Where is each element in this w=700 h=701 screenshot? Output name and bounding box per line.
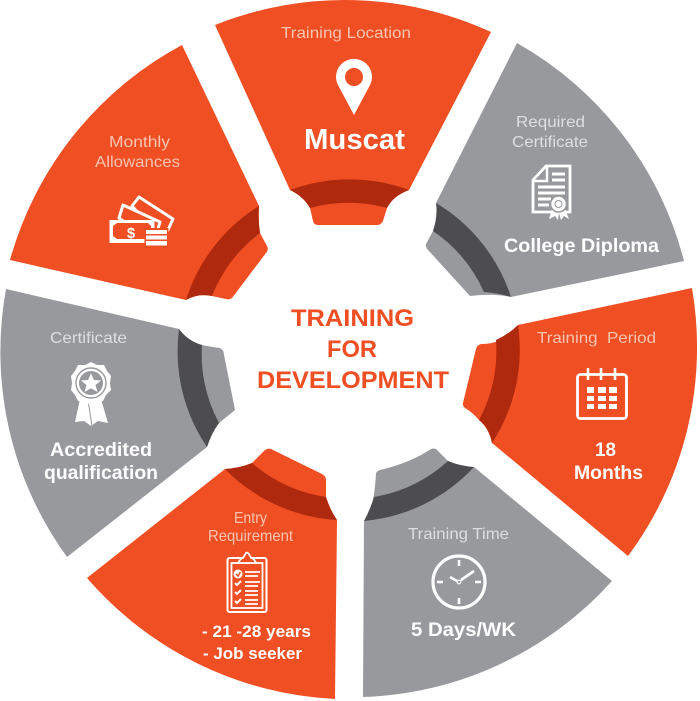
panel: required certificate <box>426 43 684 297</box>
band <box>178 329 219 447</box>
label: Training Time <box>408 526 509 543</box>
value: qualification <box>44 463 158 484</box>
value: - Job seeker <box>203 644 302 663</box>
icon: banknotes and coins: $ <box>127 225 136 242</box>
label: Certificate <box>50 330 127 347</box>
value: Months <box>574 463 643 484</box>
segment shape <box>0 289 235 557</box>
label: Requirement <box>208 528 294 545</box>
value: 5 Days/WK <box>411 620 516 641</box>
icon: map pin <box>336 59 372 115</box>
band <box>479 325 520 443</box>
value: Muscat <box>304 124 405 156</box>
icon: diploma <box>533 166 570 220</box>
segment shape <box>463 288 697 556</box>
icon: banknotes and coins <box>110 197 173 246</box>
band <box>186 206 260 300</box>
title: TRAINING <box>291 305 414 332</box>
label: Training Location <box>281 25 411 42</box>
segment shape <box>215 0 491 225</box>
panel: training time <box>363 448 612 697</box>
panel: certificate <box>0 289 235 557</box>
panel: entry requirement <box>87 449 337 699</box>
panel: monthly allowances <box>10 45 268 300</box>
value: - 21 -28 years <box>202 622 311 641</box>
value: Accredited <box>50 440 152 461</box>
segment shape <box>426 43 684 297</box>
segment shape <box>363 448 612 697</box>
value: College Diploma <box>504 236 659 257</box>
title: FOR <box>327 336 377 363</box>
icon: clock <box>433 556 485 608</box>
segment shape <box>87 449 337 699</box>
band <box>364 461 474 521</box>
label: Entry <box>234 510 267 527</box>
label: Required <box>516 114 585 131</box>
icon: rosette award <box>71 362 111 426</box>
icon: clipboard checklist <box>228 553 266 612</box>
band <box>225 463 337 520</box>
label: Certificate <box>512 134 588 151</box>
label: Monthly <box>109 134 170 151</box>
band <box>290 179 409 208</box>
icon: calendar <box>578 368 626 418</box>
panel: training period <box>463 288 697 556</box>
label: Allowances <box>95 154 180 171</box>
value: 18 <box>595 440 616 461</box>
band <box>433 203 511 297</box>
panel: training location <box>215 0 491 225</box>
segment shape <box>10 45 268 300</box>
label: Training Period <box>537 330 656 347</box>
title <box>257 305 449 394</box>
title: DEVELOPMENT <box>257 367 449 394</box>
